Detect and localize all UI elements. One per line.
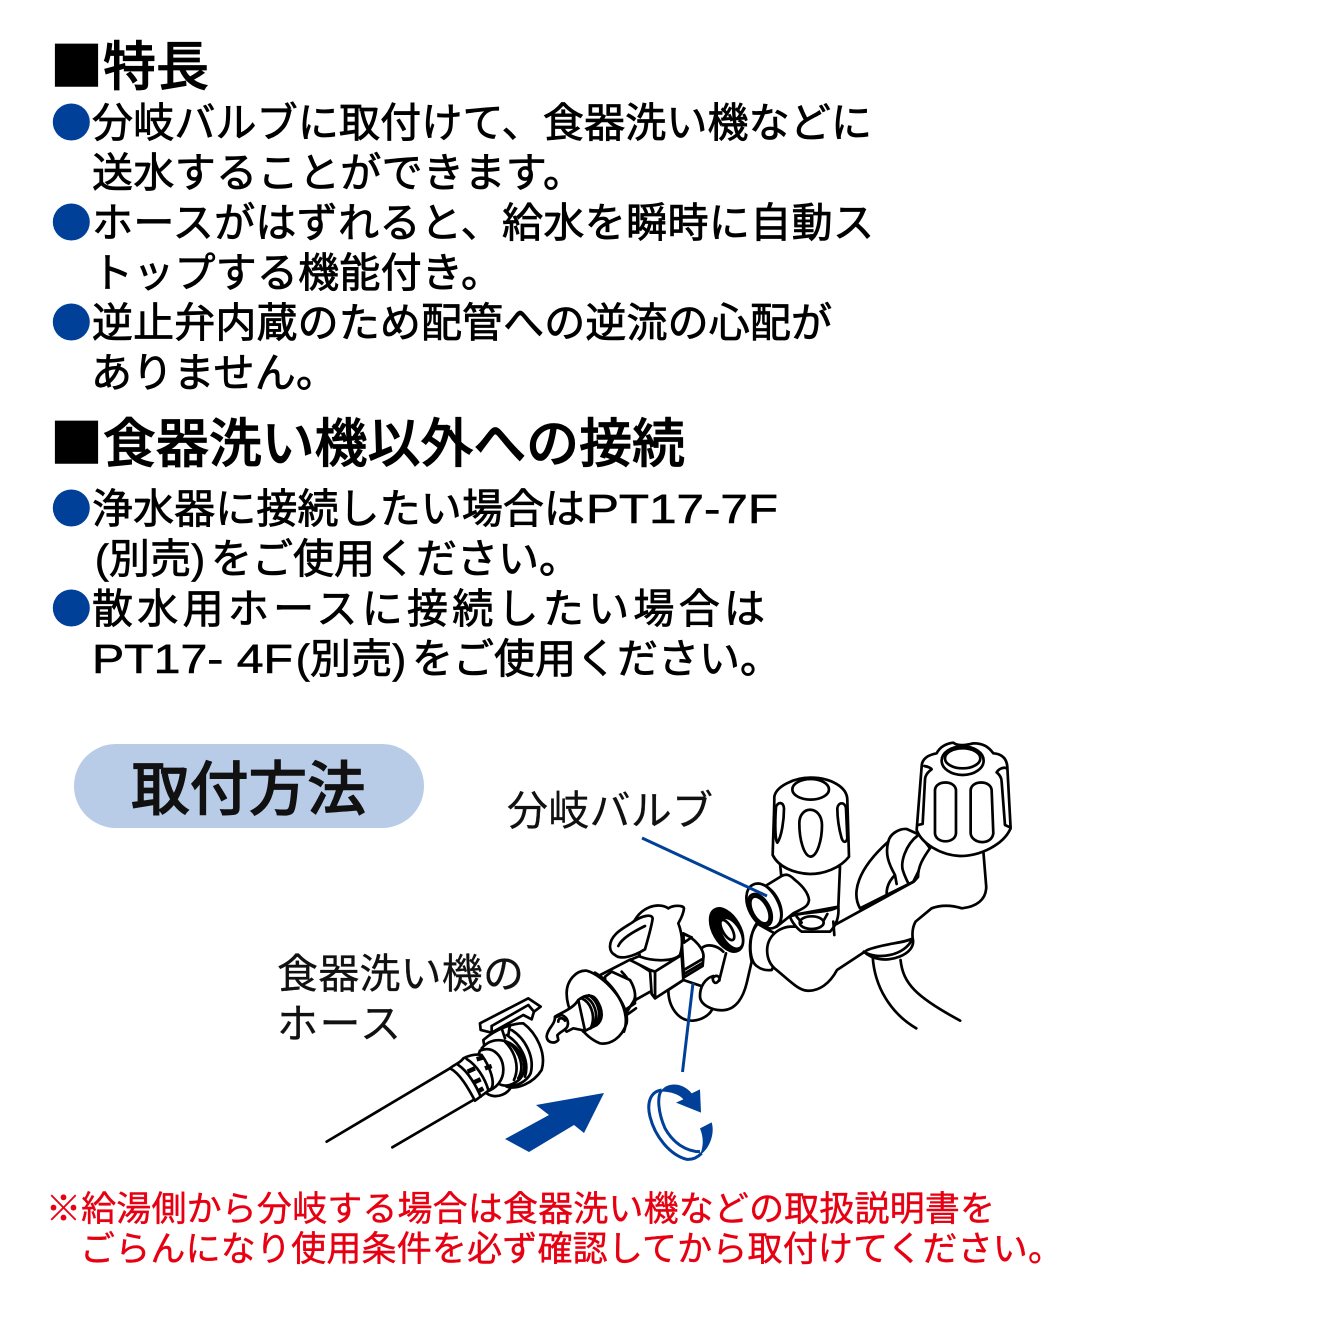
bullet 4 bbox=[53, 490, 90, 526]
elbow bbox=[700, 925, 757, 1010]
dome bbox=[632, 906, 684, 960]
large knob bbox=[917, 743, 1011, 856]
flange rim bbox=[595, 973, 626, 1032]
dome fin bbox=[683, 934, 692, 943]
bullet 3 bbox=[53, 304, 90, 340]
elbow top bbox=[702, 945, 723, 952]
leader line: branch valve bbox=[642, 838, 767, 896]
connection 2 line 2: PT17- 4F bbox=[92, 636, 293, 682]
branch valve assembly bbox=[598, 903, 757, 1021]
small knob bbox=[773, 778, 849, 874]
arrow: insert direction bbox=[505, 1093, 604, 1152]
stem base fitting bbox=[790, 907, 838, 935]
label: dishwasher hose bbox=[277, 951, 524, 1047]
bullet 1 bbox=[53, 104, 90, 140]
connection 1 line 1: PT17-7F bbox=[586, 486, 778, 532]
feature 1 line 1: 分岐バルブに取付けて、食器洗い機などに bbox=[92, 100, 872, 146]
badge: installation method: 取付方法 bbox=[131, 757, 366, 823]
heading: features: ■特長 bbox=[50, 25, 209, 101]
lever bbox=[610, 916, 653, 957]
coupling and hose bbox=[327, 971, 636, 1147]
feature 2 line 2: トップする機能付き。 bbox=[92, 250, 502, 296]
bullet 5 bbox=[53, 590, 90, 626]
connection 2 line 2: をご使用ください。 bbox=[412, 636, 781, 682]
lower pipe bulb bbox=[668, 980, 713, 1021]
label: branch valve: 分岐バルブ bbox=[507, 788, 713, 834]
illustration: faucet with valve bbox=[327, 743, 1011, 1147]
leader line: rotation bbox=[682, 983, 693, 1072]
feature 2 line 1: ホースがはずれると、給水を瞬時に自動ス bbox=[92, 200, 874, 246]
valve port bbox=[739, 875, 809, 934]
tube behind block bbox=[682, 933, 704, 977]
label: dishwasher hose: ホース bbox=[277, 1001, 401, 1047]
block side slots bbox=[685, 959, 702, 973]
block bbox=[630, 955, 683, 998]
feature 3 line 2: ありません。 bbox=[91, 350, 337, 396]
flange hub bbox=[605, 972, 636, 1015]
pipe to flange bbox=[598, 959, 653, 1007]
threaded nipple bbox=[547, 995, 602, 1042]
heading: other connections: ■食器洗い機以外への接続 bbox=[50, 402, 685, 478]
connection list bbox=[53, 486, 781, 682]
connection 1 line 1: 浄水器に接続したい場合は bbox=[92, 486, 585, 532]
quick connector bbox=[450, 998, 543, 1101]
feature 1 line 2: 送水することができます。 bbox=[92, 150, 584, 196]
connection 2 line 2: (別売) bbox=[296, 636, 406, 682]
bullet 2 bbox=[53, 204, 90, 240]
supply hose bbox=[873, 957, 960, 1028]
valve flange bbox=[567, 971, 627, 1044]
badge: installation method bbox=[74, 744, 424, 828]
faucet knobs and stem bbox=[739, 743, 1011, 935]
warning note: ごらんになり使用条件を必ず確認してから取付けてください。 bbox=[80, 1230, 1063, 1269]
connection 1 line 2: をご使用ください。 bbox=[211, 536, 580, 582]
rear curved pipe bbox=[856, 829, 930, 908]
warning note: ※給湯側から分岐する場合は食器洗い機などの取扱説明書を bbox=[46, 1190, 995, 1229]
rear elbow curve bbox=[750, 923, 787, 970]
hose lines bbox=[327, 1068, 473, 1147]
feature 3 line 1: 逆止弁内蔵のため配管への逆流の心配が bbox=[92, 300, 832, 346]
rubber washer bbox=[703, 903, 750, 957]
connection 2 line 2 bbox=[92, 636, 781, 682]
warning note bbox=[46, 1190, 1063, 1269]
stem bbox=[780, 863, 840, 915]
connection 2 line 1: 散水用ホースに接続したい場合は bbox=[92, 586, 765, 632]
feature list bbox=[53, 100, 874, 396]
icon: rotation arrow bbox=[649, 1084, 713, 1159]
faucet body bbox=[767, 847, 986, 991]
connection 1 line 2: (別売) bbox=[95, 536, 205, 582]
label: dishwasher hose: 食器洗い機の bbox=[277, 951, 524, 997]
